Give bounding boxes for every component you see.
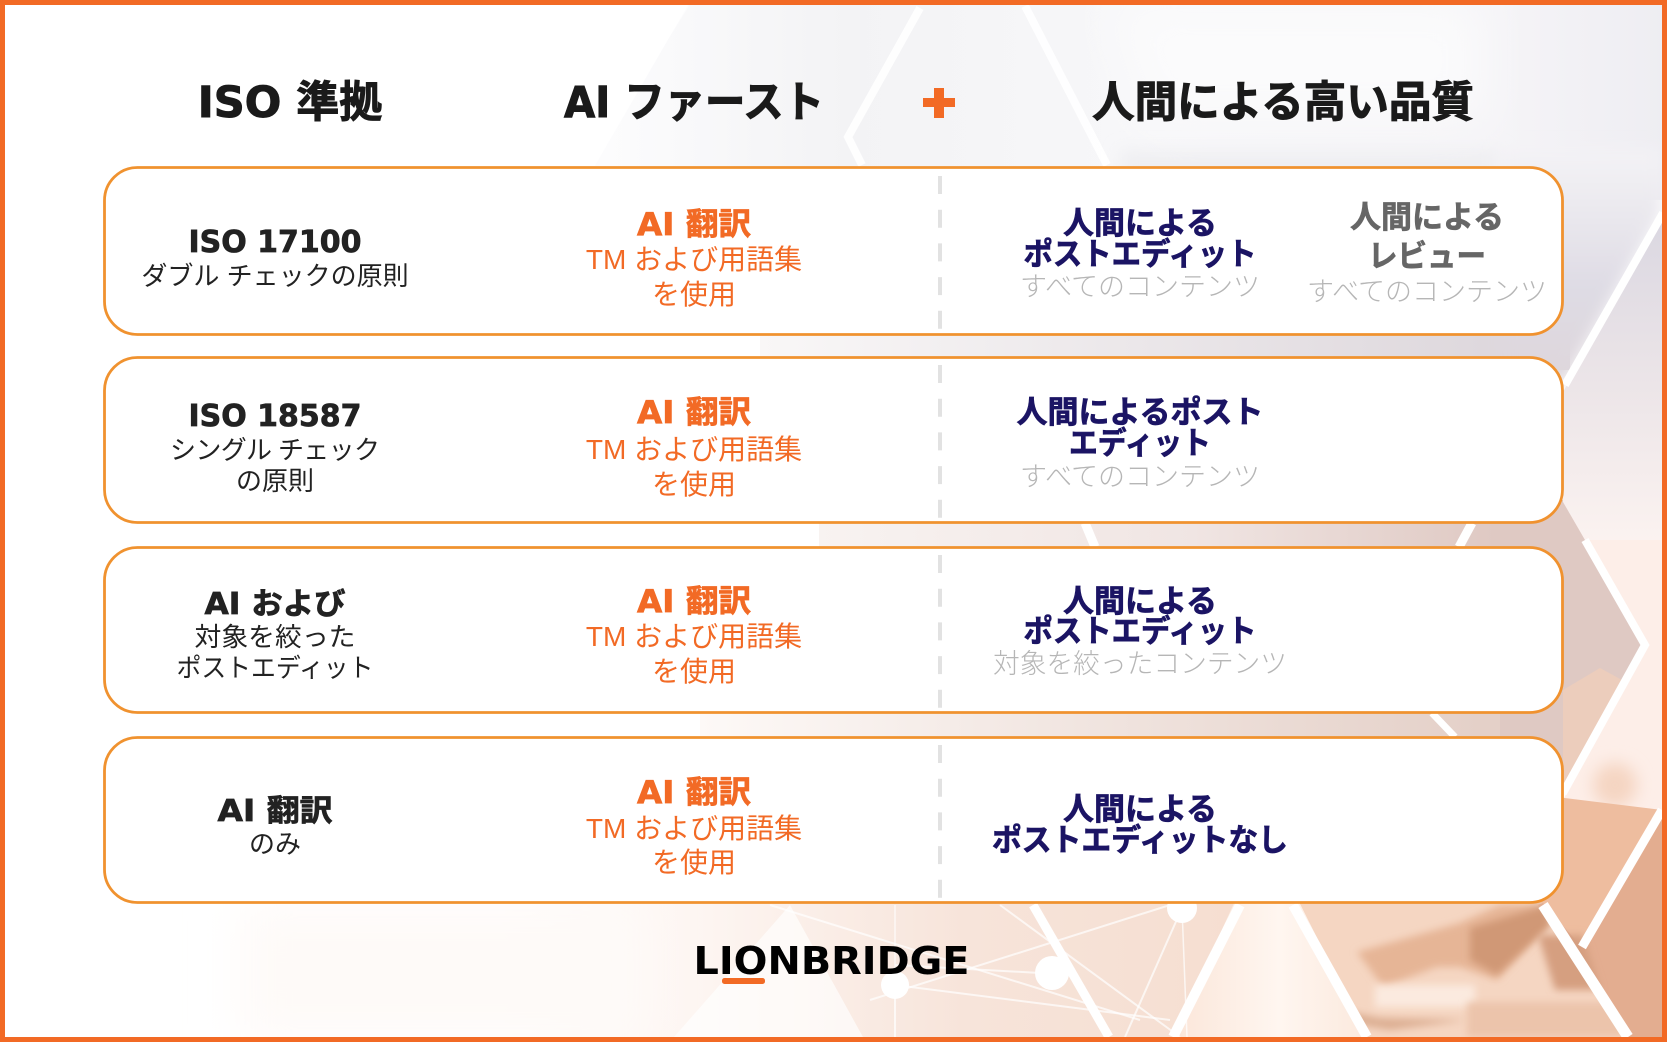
white hexagon lines: [590, 5, 1663, 1037]
label: 人間によるポストエディット: ポストエディット: [1024, 614, 1256, 650]
heading: ISO 準拠: ISO 準拠: [198, 78, 382, 128]
label: AI 翻訳: [586, 775, 802, 878]
label: 人間によるポストエディット: すべてのコンテンツ: [1020, 462, 1260, 492]
label: ISO 17100: ダブル チェックの原則: [141, 261, 409, 291]
label: 人間によるレビュー: 人間による: [1350, 200, 1504, 236]
label: AI 翻訳 のみ: [218, 794, 332, 859]
label: AI および: ポストエディット: [176, 653, 374, 683]
label: ISO 17100: ISO 17100: [188, 225, 362, 260]
label: 人間によるポストエディット: 人間による: [1063, 206, 1217, 242]
label: 人間によるレビュー: レビュー: [1368, 239, 1486, 275]
label: 人間によるポストエディットなし: 人間による: [1063, 792, 1217, 828]
label: AI 翻訳 のみ: のみ: [249, 829, 301, 859]
label: AI 翻訳: AI 翻訳: [637, 584, 751, 620]
label: 人間によるポストエディットなし: [992, 792, 1288, 859]
photo area lower right: [1293, 890, 1625, 1037]
label: AI および: [176, 587, 374, 683]
heading: 人間による高い品質: 人間による高い品質: [1092, 78, 1474, 128]
label: ISO 18587: の原則: [236, 466, 314, 496]
label: 人間によるレビュー: すべてのコンテンツ: [1307, 277, 1547, 307]
label: 人間によるポストエディット: 対象を絞ったコンテンツ: [993, 649, 1287, 679]
label: AI 翻訳: AI 翻訳: [637, 207, 751, 243]
label: 人間によるポストエディット: [1016, 395, 1264, 492]
label: 人間によるポストエディット: [993, 584, 1287, 679]
panel: row 1 ISO 17100: [104, 168, 1562, 334]
label: 人間によるポストエディット: エディット: [1069, 426, 1211, 462]
label: AI 翻訳: を使用: [652, 279, 736, 310]
label: AI 翻訳: [586, 395, 802, 500]
label: AI 翻訳: TM および用語集: [586, 813, 802, 844]
logo: Lionbridge: LIONBRIDGE: [694, 939, 970, 984]
label: 人間によるポストエディットなし: ポストエディットなし: [992, 823, 1288, 859]
panel: row 2 ISO 18587: [104, 358, 1562, 522]
label: AI および: 対象を絞った: [194, 622, 356, 652]
label: AI 翻訳: AI 翻訳: [637, 395, 751, 431]
label: AI 翻訳: を使用: [652, 847, 736, 878]
label: ISO 18587: ISO 18587: [188, 399, 362, 434]
label: 人間によるポストエディット: 人間によるポスト: [1016, 395, 1264, 431]
label: 人間によるポストエディット: ポストエディット: [1024, 237, 1256, 273]
label: AI 翻訳: を使用: [652, 656, 736, 687]
label: AI 翻訳: を使用: [652, 469, 736, 500]
heading: AI ファースト: AI ファースト: [564, 78, 824, 128]
label: AI 翻訳: [586, 207, 802, 310]
label: AI 翻訳: TM および用語集: [586, 621, 802, 652]
panel: row 3 AI および: [104, 548, 1562, 712]
label: 人間によるレビュー: [1307, 200, 1547, 307]
label: ISO 17100: [141, 225, 409, 291]
label: AI 翻訳: [586, 584, 802, 687]
label: ISO 18587: シングル チェック: [170, 435, 380, 465]
panel: row 4 AI 翻訳のみ: [104, 738, 1562, 902]
label: 人間によるポストエディット: 人間による: [1063, 584, 1217, 620]
label: AI 翻訳: TM および用語集: [586, 434, 802, 465]
label: 人間によるポストエディット: すべてのコンテンツ: [1020, 272, 1260, 302]
label: AI 翻訳 のみ: AI 翻訳: [218, 794, 332, 829]
label: AI 翻訳: AI 翻訳: [637, 775, 751, 811]
label: AI および: AI および: [204, 587, 346, 622]
label: AI 翻訳: TM および用語集: [586, 244, 802, 275]
label: ISO 18587: [170, 399, 380, 496]
icon: plus sign: [923, 88, 955, 118]
label: 人間によるポストエディット: [1020, 206, 1260, 302]
